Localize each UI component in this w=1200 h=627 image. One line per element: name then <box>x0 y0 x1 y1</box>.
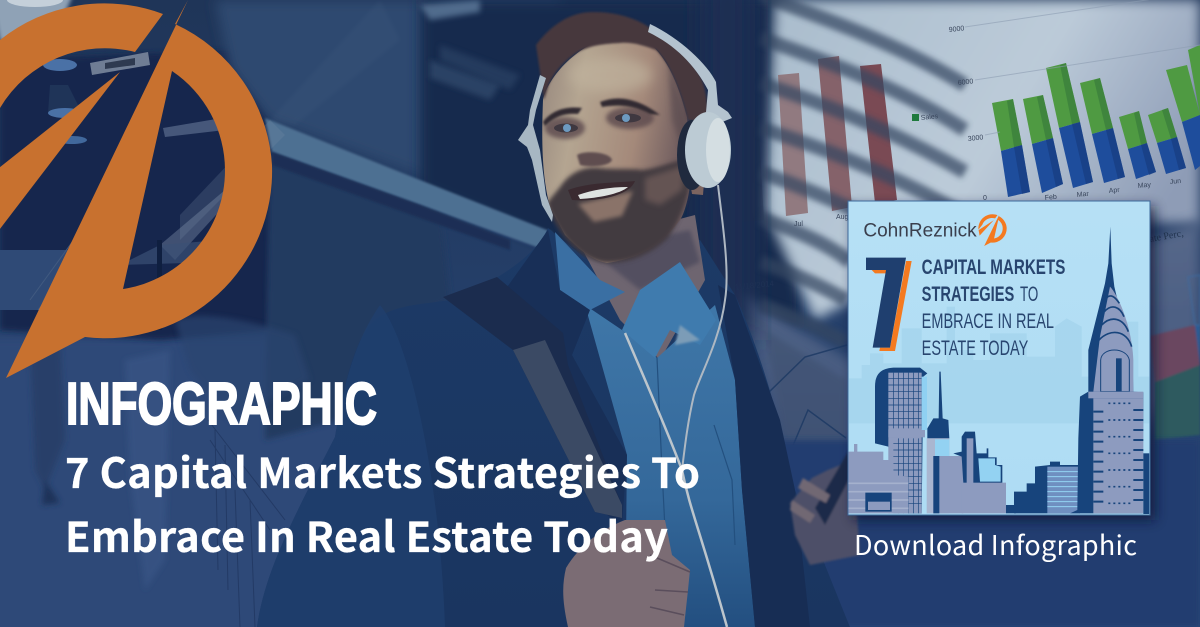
mouth <box>568 181 635 200</box>
hair <box>536 12 708 122</box>
chart background right <box>700 0 1200 627</box>
top left lamp <box>0 0 75 42</box>
street lower left <box>0 335 380 627</box>
card shadow <box>853 206 1155 520</box>
man with headphones <box>257 12 862 627</box>
chart axis labels <box>734 25 1184 292</box>
right low buildings <box>1006 462 1080 513</box>
lower grey panel <box>735 220 1200 500</box>
window blind shadows <box>760 0 965 342</box>
slanted roof <box>265 118 552 250</box>
lower right navy <box>760 440 1200 627</box>
chart axis labels: 11/18/2014 <box>734 279 775 292</box>
chart axis labels: Mar <box>1076 191 1090 199</box>
chart axis labels: May <box>1137 182 1152 190</box>
left eyebrow and eye <box>543 108 582 132</box>
beard <box>547 160 690 263</box>
jacket body <box>257 228 850 627</box>
band <box>648 24 732 125</box>
blurred dark background behind head <box>420 0 800 330</box>
ear <box>688 170 705 195</box>
lower left building <box>848 444 908 513</box>
chart axis labels: 3000 <box>967 134 984 143</box>
chart axis labels: Jul <box>794 221 803 228</box>
shrubs <box>175 316 310 420</box>
forehead highlight <box>568 57 652 93</box>
cover title <box>922 260 1065 355</box>
right eyebrow and eye <box>600 98 660 122</box>
title: INFOGRAPHIC: INFOGRAPHIC <box>66 371 377 437</box>
collar left <box>555 232 625 310</box>
earphone cables <box>625 185 727 627</box>
cover title: CAPITAL MARKETS <box>922 254 1065 279</box>
big number 7 <box>866 258 912 351</box>
cover title: EMBRACE IN REAL <box>922 308 1054 333</box>
headphones <box>518 24 732 222</box>
chart axis labels: Jun <box>1169 178 1182 186</box>
collar right <box>622 262 716 358</box>
heading line 2: Embrace In Real Estate Today <box>65 504 668 564</box>
center towers <box>927 372 1006 513</box>
shoulder strap <box>443 277 622 518</box>
neck <box>580 215 705 360</box>
chart axis labels: ate Perc, <box>1149 228 1184 245</box>
head <box>536 12 708 263</box>
chart axis labels: Aug <box>836 214 849 221</box>
cover title: TO <box>1020 281 1038 306</box>
chart axis labels: 6000 <box>957 78 974 87</box>
left band <box>518 75 553 222</box>
dark left fade <box>700 0 755 340</box>
fist <box>563 520 690 627</box>
line chart <box>740 345 847 500</box>
cover title: ESTATE TODAY <box>922 335 1028 360</box>
chart axis labels: 0 <box>983 195 987 202</box>
ear cup <box>677 120 707 190</box>
pie wedges lower right <box>1150 275 1200 440</box>
orange logo <box>0 0 272 378</box>
shirt placket and pocket <box>657 358 735 627</box>
left lapel <box>505 230 627 525</box>
dark building interior <box>0 50 275 340</box>
right lapel <box>718 285 810 627</box>
skin patch under lip <box>578 191 633 222</box>
faded skyline <box>848 307 1149 423</box>
face <box>542 33 690 263</box>
chart grid lines <box>965 0 1200 135</box>
chart axis labels: Sales <box>920 113 939 122</box>
stair railing <box>208 420 285 627</box>
left arm shading <box>257 305 445 627</box>
interior details <box>0 52 225 330</box>
cheek patch on right <box>645 165 685 205</box>
teeth <box>578 187 628 199</box>
company wordmark: CohnReznick <box>863 221 977 242</box>
stacked bars chart <box>992 45 1200 197</box>
building facade <box>265 150 450 440</box>
right hand and phone <box>790 445 862 565</box>
heading line 1: 7 Capital Markets Strategies To <box>65 440 700 500</box>
chart axis labels: Apr <box>1108 187 1121 195</box>
light sheet <box>765 0 1200 320</box>
chart axis labels: Feb <box>1044 194 1057 202</box>
infographic cover card <box>848 201 1155 520</box>
temple shade <box>668 60 690 170</box>
chart axis labels: 9000 <box>948 25 965 34</box>
socket shadows <box>545 117 585 139</box>
nose shadow <box>577 152 612 166</box>
left tower <box>875 368 927 513</box>
download label: Download Infographic <box>854 524 1137 563</box>
small orange logo <box>978 214 1007 246</box>
red bars <box>737 56 897 222</box>
Chrysler-style skyscraper <box>1070 227 1149 514</box>
upper mid wall <box>215 0 560 190</box>
blurred pedestrians <box>30 330 170 590</box>
shirt <box>585 305 755 627</box>
cover title: STRATEGIES <box>922 281 1014 306</box>
